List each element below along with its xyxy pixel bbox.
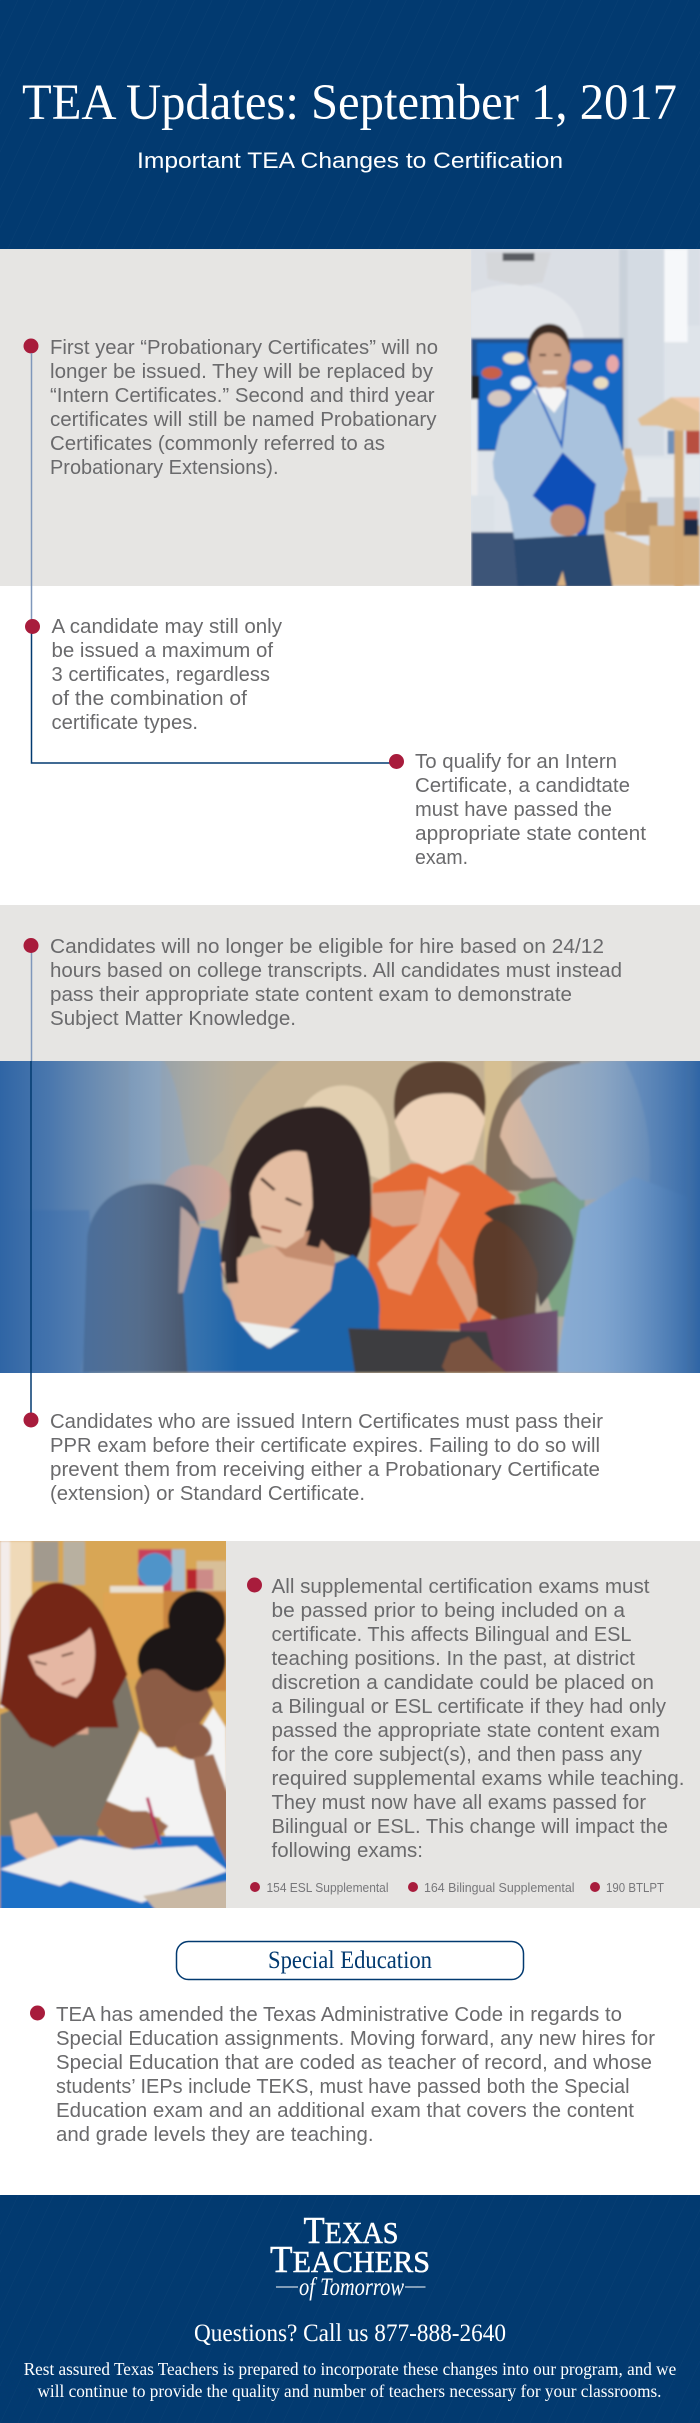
text: hiring eligibility: pass their appropriate state content exam to demonstrate [50,984,572,1006]
panel: footer [0,2195,700,2423]
text: supplemental exams: They must now have all exams passed for [272,1792,646,1814]
text: supplemental exams: Bilingual or ESL. This change will impact the [272,1816,668,1838]
text: probationary certificates: First year “Probationary Certificates” will no [50,337,438,359]
text: intern qualification: Certificate, a candidtate [415,775,630,797]
text: probationary certificates: “Intern Certificates.” Second and third year [50,385,435,407]
panel: supplemental exams [0,1538,700,1914]
heading pill: Special Education [176,1942,524,1980]
item: intern certificate qualification [389,751,646,869]
logo: Texas Teachers of Tomorrow [270,2210,430,2301]
exam list: 154 ESL Supplemental: 154 ESL Supplemental [266,1881,388,1895]
text: supplemental exams [272,1576,684,1862]
text: supplemental exams: All supplemental certification exams must [272,1576,650,1598]
closing statement: Rest assured Texas Teachers is prepared to incorporate these changes into our program, and we [24,2359,676,2379]
text: supplemental exams: a Bilingual or ESL certificate if they had only [272,1696,666,1718]
text: PPR exam [50,1411,603,1505]
phone call to action: Questions? Call us 877-888-2640 [194,2320,506,2347]
text: special education: Special Education that are coded as teacher of record, and whose [56,2052,652,2074]
logo: Texas Teachers of Tomorrow: TEACHERS [270,2239,430,2281]
text: special education [56,2004,655,2146]
logo: Texas Teachers of Tomorrow: of Tomorrow [299,2274,404,2301]
photo: male teacher in classroom [468,246,700,589]
bullet [24,1412,38,1428]
exam list: 164 Bilingual Supplemental: 164 Bilingual Supplemental [424,1881,574,1895]
text: maximum certificates [52,616,282,734]
text: PPR exam: prevent them from receiving either a Probationary Certificate [50,1459,600,1481]
text: supplemental exams: discretion a candidate could be placed on [272,1672,654,1694]
text: maximum certificates: be issued a maximum of [52,640,273,662]
closing statement [24,2359,676,2401]
text: probationary certificates [50,337,438,479]
panel: header banner [0,0,700,249]
bullet [247,1578,262,1592]
subtitle: Important TEA Changes to Certification [137,148,563,173]
text: maximum certificates: A candidate may still only [52,616,282,638]
text: supplemental exams: for the core subject(s), and then pass any [272,1744,642,1766]
text: supplemental exams: passed the appropriate state content exam [272,1720,660,1742]
heading pill: Special Education: Special Education [268,1947,432,1974]
text: special education: Special Education assignments. Moving forward, any new hires for [56,2028,655,2050]
text: intern qualification: exam. [415,847,468,869]
text: PPR exam: PPR exam before their certificate expires. Failing to do so will [50,1435,600,1457]
connector line across photo [30,1061,32,1420]
photo: teacher with children and tablet [0,1057,700,1377]
text: special education: Education exam and an additional exam that covers the content [56,2100,634,2122]
item: PPR exam [24,1411,603,1505]
text: supplemental exams: required supplemental exams while teaching. [272,1768,684,1790]
text: special education: TEA has amended the Texas Administrative Code in regards to [56,2004,622,2026]
panel: hiring eligibility [0,905,700,1061]
connector line from first bullet [30,353,32,627]
text: special education: students’ IEPs include TEKS, must have passed both the Special [56,2076,630,2098]
title: TEA Updates: September 1, 2017 [22,75,677,131]
panel: probationary certificates [0,246,700,589]
text: maximum certificates: certificate types. [52,712,198,734]
text: probationary certificates: Certificates (commonly referred to as [50,433,385,455]
text: supplemental exams: following exams: [272,1840,423,1862]
photo: teacher and student reading [0,1538,230,1914]
text: hiring eligibility [50,936,622,1030]
text: special education: and grade levels they are teaching. [56,2124,374,2146]
bullet [25,619,40,634]
text: maximum certificates: 3 certificates, regardless [52,664,270,686]
text: intern qualification [415,751,646,869]
bullet [389,754,404,769]
text: maximum certificates: of the combination of [52,688,247,710]
closing statement: will continue to provide the quality and number of teachers necessary for your classrooms. [38,2381,662,2401]
text: supplemental exams: teaching positions. In the past, at district [272,1648,635,1670]
bullet [24,338,38,354]
text: hiring eligibility: Subject Matter Knowledge. [50,1008,296,1030]
text: intern qualification: appropriate state content [415,823,646,845]
text: probationary certificates: longer be issued. They will be replaced by [50,361,433,383]
text: PPR exam: (extension) or Standard Certificate. [50,1483,365,1505]
text: hiring eligibility: hours based on college transcripts. All candidates must instead [50,960,622,982]
text: PPR exam: Candidates who are issued Intern Certificates must pass their [50,1411,603,1433]
text: supplemental exams: be passed prior to being included on a [272,1600,626,1622]
bullet [30,2006,45,2020]
connector line to intern bullet [32,627,393,763]
bullet [24,938,38,953]
exam list: 190 BTLPT: 190 BTLPT [606,1881,664,1895]
text: intern qualification: To qualify for an Intern [415,751,617,773]
text: hiring eligibility: Candidates will no longer be eligible for hire based on 24/12 [50,936,604,958]
text: intern qualification: must have passed the [415,799,612,821]
item: special education [30,2004,655,2146]
text: probationary certificates: certificates will still be named Probationary [50,409,437,431]
item: maximum of 3 certificates [25,616,282,734]
logo: Texas Teachers of Tomorrow: TEXAS [304,2210,398,2252]
text: supplemental exams: certificate. This affects Bilingual and ESL [272,1624,632,1646]
text: probationary certificates: Probationary Extensions). [50,457,278,479]
